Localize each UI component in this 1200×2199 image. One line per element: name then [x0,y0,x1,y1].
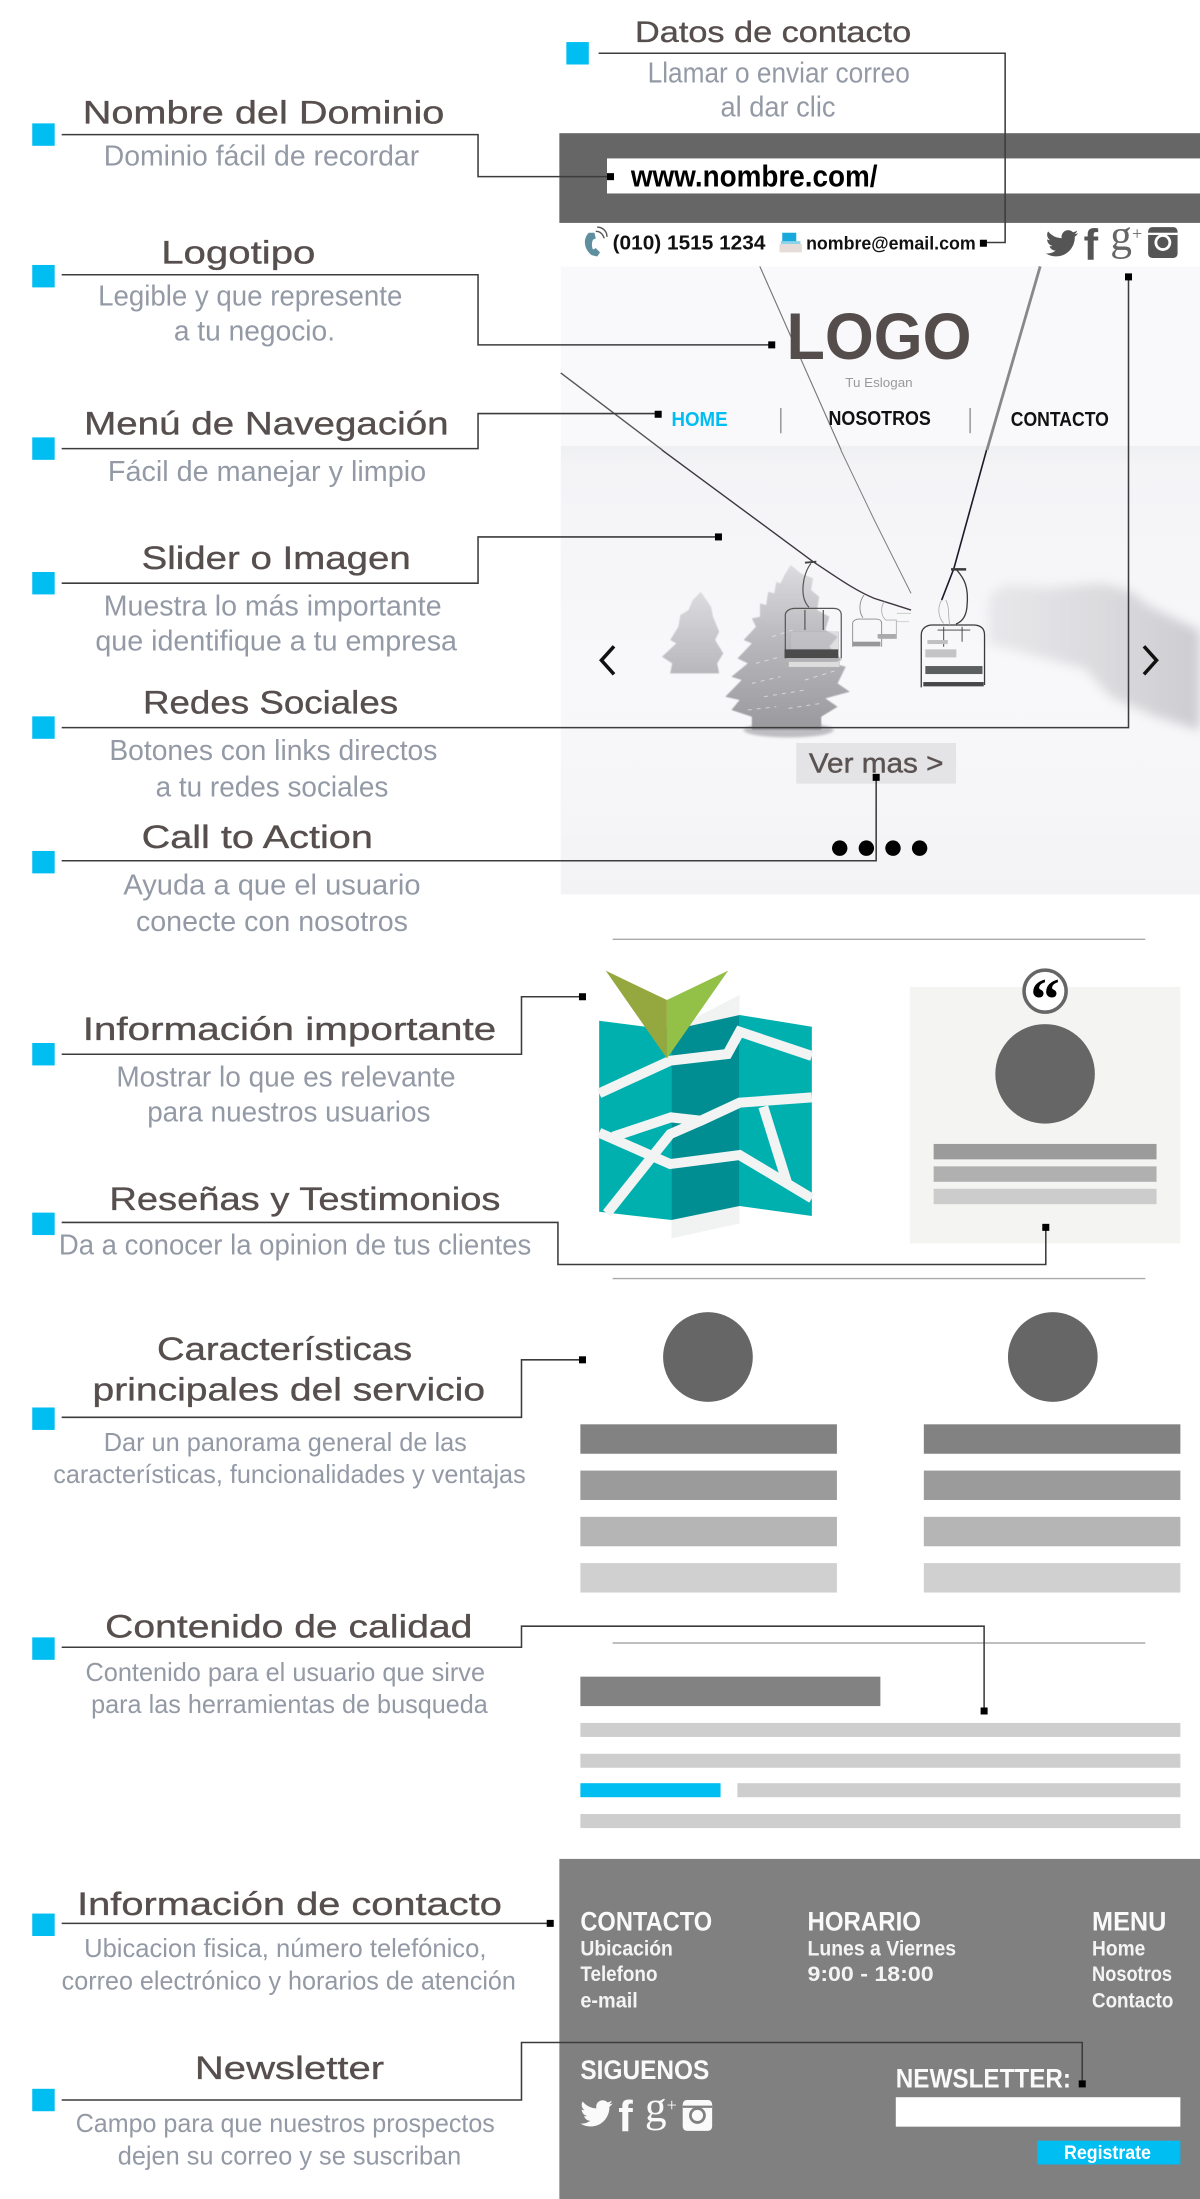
callout: caracteristicas principales: principales del servicio [93,1371,485,1407]
slogan: Tu Eslogan [845,375,913,390]
review text bars [934,1144,1157,1204]
callout: menu de navegacion: Menú de Navegación [84,406,449,442]
callout: nombre del dominio: Nombre del Dominio [83,94,444,130]
callout: contenido de calidad: para las herramientas de busqueda [91,1691,488,1719]
chair 1 [785,562,841,667]
footer newsletter: Registrate [1064,2142,1151,2164]
callout: informacion importante [32,993,586,1129]
features column 1 [580,1312,837,1593]
footer contact column: e-mail [580,1989,638,2012]
footer contact column [580,1906,712,2012]
footer social icons [580,2083,712,2141]
callout: nombre del dominio: Dominio fácil de recordar [104,140,420,172]
callout: datos de contacto [566,16,1005,247]
avatar [995,1024,1095,1124]
callout: slider o imagen: que identifique a tu empresa [95,625,457,657]
callout: informacion de contacto [32,1886,554,1995]
callout: caracteristicas principales: Dar un panorama general de las [104,1429,467,1457]
callout: newsletter: Campo para que nuestros prospectos [76,2110,495,2138]
phone number: (010) 1515 1234 [613,233,766,255]
snow on tree [748,630,838,710]
callout: caracteristicas principales [32,1331,586,1489]
callout: datos de contacto: Datos de contacto [635,16,911,49]
far chairs [939,600,950,625]
callout: caracteristicas principales: características, funcionalidades y ventajas [53,1461,526,1489]
footer contact column: Telefono [580,1963,658,1986]
upper cables [561,266,1040,450]
callout: informacion importante: Información importante [83,1011,496,1047]
icon: phone [585,227,607,257]
cables [662,450,987,610]
footer hours column: HORARIO [807,1906,921,1936]
callout: informacion importante: Mostrar lo que es relevante [116,1061,456,1093]
testimonial card [910,967,1180,1243]
dividers [613,939,1145,1643]
footer social icons: + [667,2095,677,2115]
slider dots [832,840,927,856]
call to action button [796,743,956,784]
callout: slider o imagen: Slider o Imagen [142,540,411,576]
callout: newsletter: Newsletter [195,2050,384,2086]
illustration: folded map with pin [599,971,812,1238]
forest [988,583,1200,730]
domain text: www.nombre.com/ [630,158,878,193]
callout: logotipo [32,235,775,348]
callout: menu de navegacion: Fácil de manejar y limpio [108,456,426,488]
hero photo: snowy chairlift [561,266,1200,894]
contact row [585,212,1178,269]
callout: call to action: Call to Action [142,819,373,855]
footer [559,1859,1200,2199]
footer newsletter: NEWSLETTER: [896,2063,1071,2093]
icon: mail [779,233,802,252]
footer hours column: 9:00 - 18:00 [807,1963,934,1986]
callout: caracteristicas principales: Características [157,1331,412,1367]
tree shadow [744,723,833,737]
callout: nombre del dominio [32,94,614,180]
callout: informacion de contacto: correo electrónico y horarios de atención [62,1967,516,1995]
icon: google plus: g [1110,212,1132,260]
footer menu column [1092,1906,1174,2012]
icon: twitter [1046,230,1078,256]
footer menu column: Contacto [1092,1989,1174,2012]
small tree [662,592,723,673]
callout: slider o imagen [32,533,722,657]
footer hours column: Lunes a Viernes [807,1938,956,1961]
footer social icons: f [618,2093,633,2141]
callout: call to action: conecte con nosotros [136,906,408,938]
arrow: previous [601,646,614,674]
footer menu column: Home [1092,1938,1145,1961]
callout: slider o imagen: Muestra lo más importante [104,590,442,622]
callout: call to action: Ayuda a que el usuario [123,869,421,901]
footer newsletter [896,2063,1180,2164]
footer social [580,2055,712,2141]
callout: informacion de contacto: Ubicacion fisica, número telefónico, [84,1935,486,1963]
footer contact column: CONTACTO [580,1906,712,1936]
callout: resenas y testimonios: Da a conocer la opinion de tus clientes [59,1230,531,1262]
footer social: SIGUENOS [580,2055,709,2085]
arrow: next [1144,646,1157,674]
callout: call to action [32,774,880,938]
navigation menu: HOME [671,409,728,431]
callout: newsletter [32,2043,1086,2170]
call to action button: Ver mas > [809,747,943,778]
callout: resenas y testimonios: Reseñas y Testimonios [109,1181,500,1217]
icon: facebook: f [1084,221,1099,269]
callout: menu de navegacion [32,406,662,488]
callout: contenido de calidad: Contenido para el usuario que sirve [86,1659,485,1687]
features column 2 [924,1312,1180,1593]
social icons [1046,212,1178,269]
callout: redes sociales: Botones con links directos [109,735,437,767]
callout: datos de contacto: al dar clic [721,91,836,123]
callout: contenido de calidad [32,1608,988,1719]
callout: informacion de contacto: Información de contacto [77,1886,502,1922]
quality content block [580,1677,1180,1828]
big tree [725,565,850,730]
callout: redes sociales: a tu redes sociales [156,771,388,803]
callout: redes sociales [32,273,1132,803]
icon: google plus: + [1132,224,1142,244]
chair 2 [853,595,911,647]
footer menu column: Nosotros [1092,1963,1172,1986]
map pin [606,971,728,1058]
email address: nombre@email.com [806,234,976,255]
callout: datos de contacto: Llamar o enviar correo [648,58,910,90]
navigation menu: CONTACTO [1011,409,1109,431]
callout: logotipo: a tu negocio. [174,316,335,348]
navigation menu: NOSOTROS [829,408,931,430]
callout: informacion importante: para nuestros usuarios [147,1097,430,1129]
footer social icons: g [645,2083,667,2131]
footer menu column: MENU [1092,1906,1166,1936]
callout: resenas y testimonios [32,1181,1049,1264]
callout: logotipo: Legible y que represente [98,281,402,313]
navigation menu [671,408,1109,433]
icon: instagram [1148,227,1178,258]
callout: contenido de calidad: Contenido de calidad [105,1608,472,1644]
chair 3 [921,569,985,687]
footer hours column [807,1906,956,1986]
header bar with domain field [559,133,1200,223]
callout: logotipo: Logotipo [161,235,315,271]
callout: newsletter: dejen su correo y se suscriban [118,2142,461,2170]
quote icon: “ [1030,967,1060,1032]
footer contact column: Ubicación [580,1938,673,1961]
quote icon [1024,967,1066,1032]
callout: redes sociales: Redes Sociales [143,685,398,721]
logo: LOGO [786,299,971,373]
